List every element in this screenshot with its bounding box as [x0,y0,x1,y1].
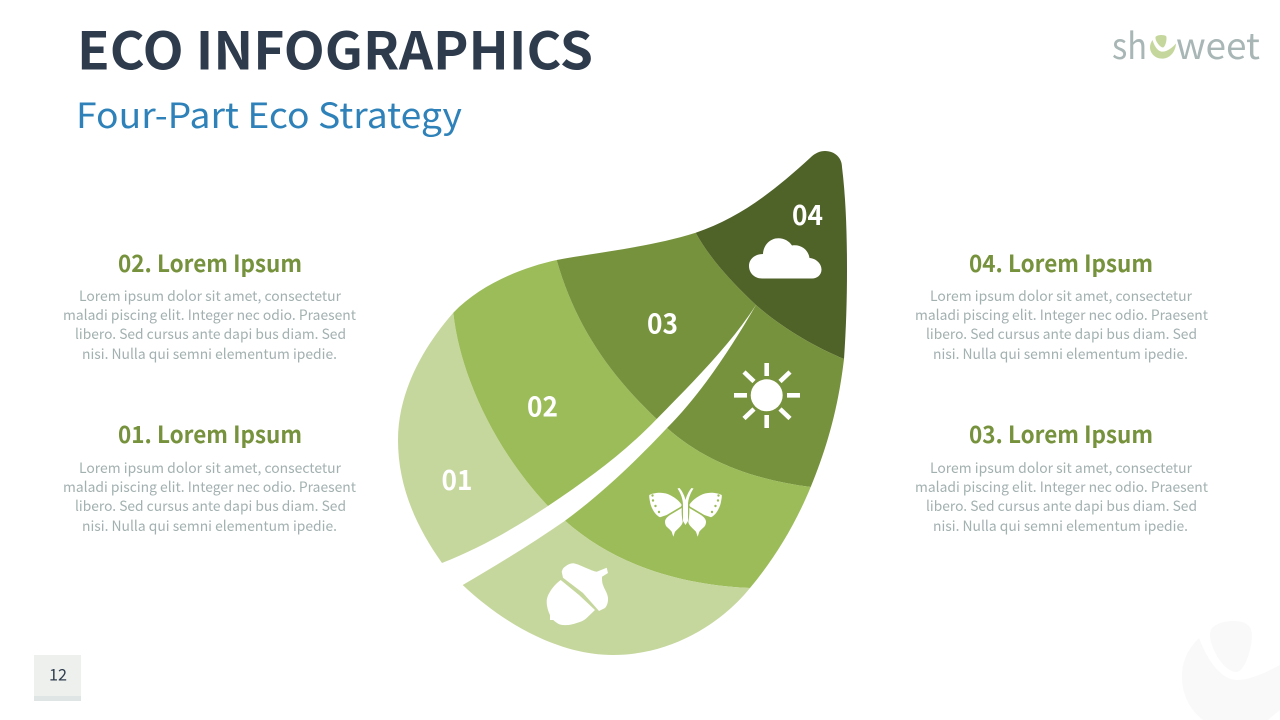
text block: 02: nisi. Nulla qui semni elementum ipedie. [82,344,337,364]
text block: 03: nisi. Nulla qui semni elementum ipedie. [933,516,1188,536]
panel: 01 Lorem Ipsum [63,416,357,536]
leaf segment: 03 upper [557,233,756,419]
logo: showeet: sh [1112,18,1147,70]
label: 01: 01 [442,458,472,498]
text block: 02: Lorem ipsum dolor sit amet, consectetur [79,286,342,306]
logo: showeet [1112,18,1260,70]
text block: 01: Lorem ipsum dolor sit amet, consectetur [79,458,342,478]
heading: 01: 01. Lorem Ipsum [118,416,302,450]
page number [34,655,81,701]
text block: 04: maladi piscing elit. Integer nec odio. Praesent [915,305,1209,325]
text block: 01 [63,458,357,536]
page number: 12 [49,662,67,686]
leaf segment: 02 upper [453,260,657,506]
heading: 03: 03. Lorem Ipsum [969,416,1153,450]
text block: 04: nisi. Nulla qui semni elementum ipedie. [933,344,1188,364]
leaf segment: 01 lower [463,521,750,655]
text block: 01: maladi piscing elit. Integer nec odio. Praesent [63,477,357,497]
icon: butterfly [649,488,722,537]
leaf segment: 04 top [696,151,847,359]
leaf segment: 03 lower [667,305,844,487]
subtitle: Four-Part Eco Strategy [76,88,462,139]
text block: 01: libero. Sed cursus ante dapi bus diam. Sed [75,496,346,516]
text block: 04: Lorem ipsum dolor sit amet, consectetur [930,286,1193,306]
icon: cloud [749,238,822,278]
leaf segment: 01 upper [398,313,548,563]
title: ECO INFOGRAPHICS [77,10,593,84]
text block: 02 [63,286,357,364]
text block: 03: maladi piscing elit. Integer nec odio. Praesent [915,477,1209,497]
text block: 03 [915,458,1209,536]
panel: 04 Lorem Ipsum [915,245,1209,364]
text block: 04 [915,286,1209,364]
label: 02: 02 [527,384,558,424]
chart: leaf diagram [398,151,847,655]
icon: acorn [547,563,608,625]
heading: 04: 04. Lorem Ipsum [969,245,1153,279]
leaf segment: 02 lower [565,428,811,588]
text block: 03: libero. Sed cursus ante dapi bus diam. Sed [926,496,1197,516]
panel: 03 Lorem Ipsum [915,416,1209,536]
logo: showeet: weet [1176,18,1260,70]
label: 04: 04 [792,193,823,233]
text block: 01: nisi. Nulla qui semni elementum ipedie. [82,516,337,536]
label: 03: 03 [647,302,678,342]
text block: 02: maladi piscing elit. Integer nec odio. Praesent [63,305,357,325]
panel: 02 Lorem Ipsum [63,245,357,364]
watermark: logo shape [1182,621,1280,720]
heading: 02: 02. Lorem Ipsum [118,245,302,279]
icon: sun [734,363,800,428]
text block: 04: libero. Sed cursus ante dapi bus diam. Sed [926,324,1197,344]
text block: 02: libero. Sed cursus ante dapi bus diam. Sed [75,324,346,344]
text block: 03: Lorem ipsum dolor sit amet, consectetur [930,458,1193,478]
